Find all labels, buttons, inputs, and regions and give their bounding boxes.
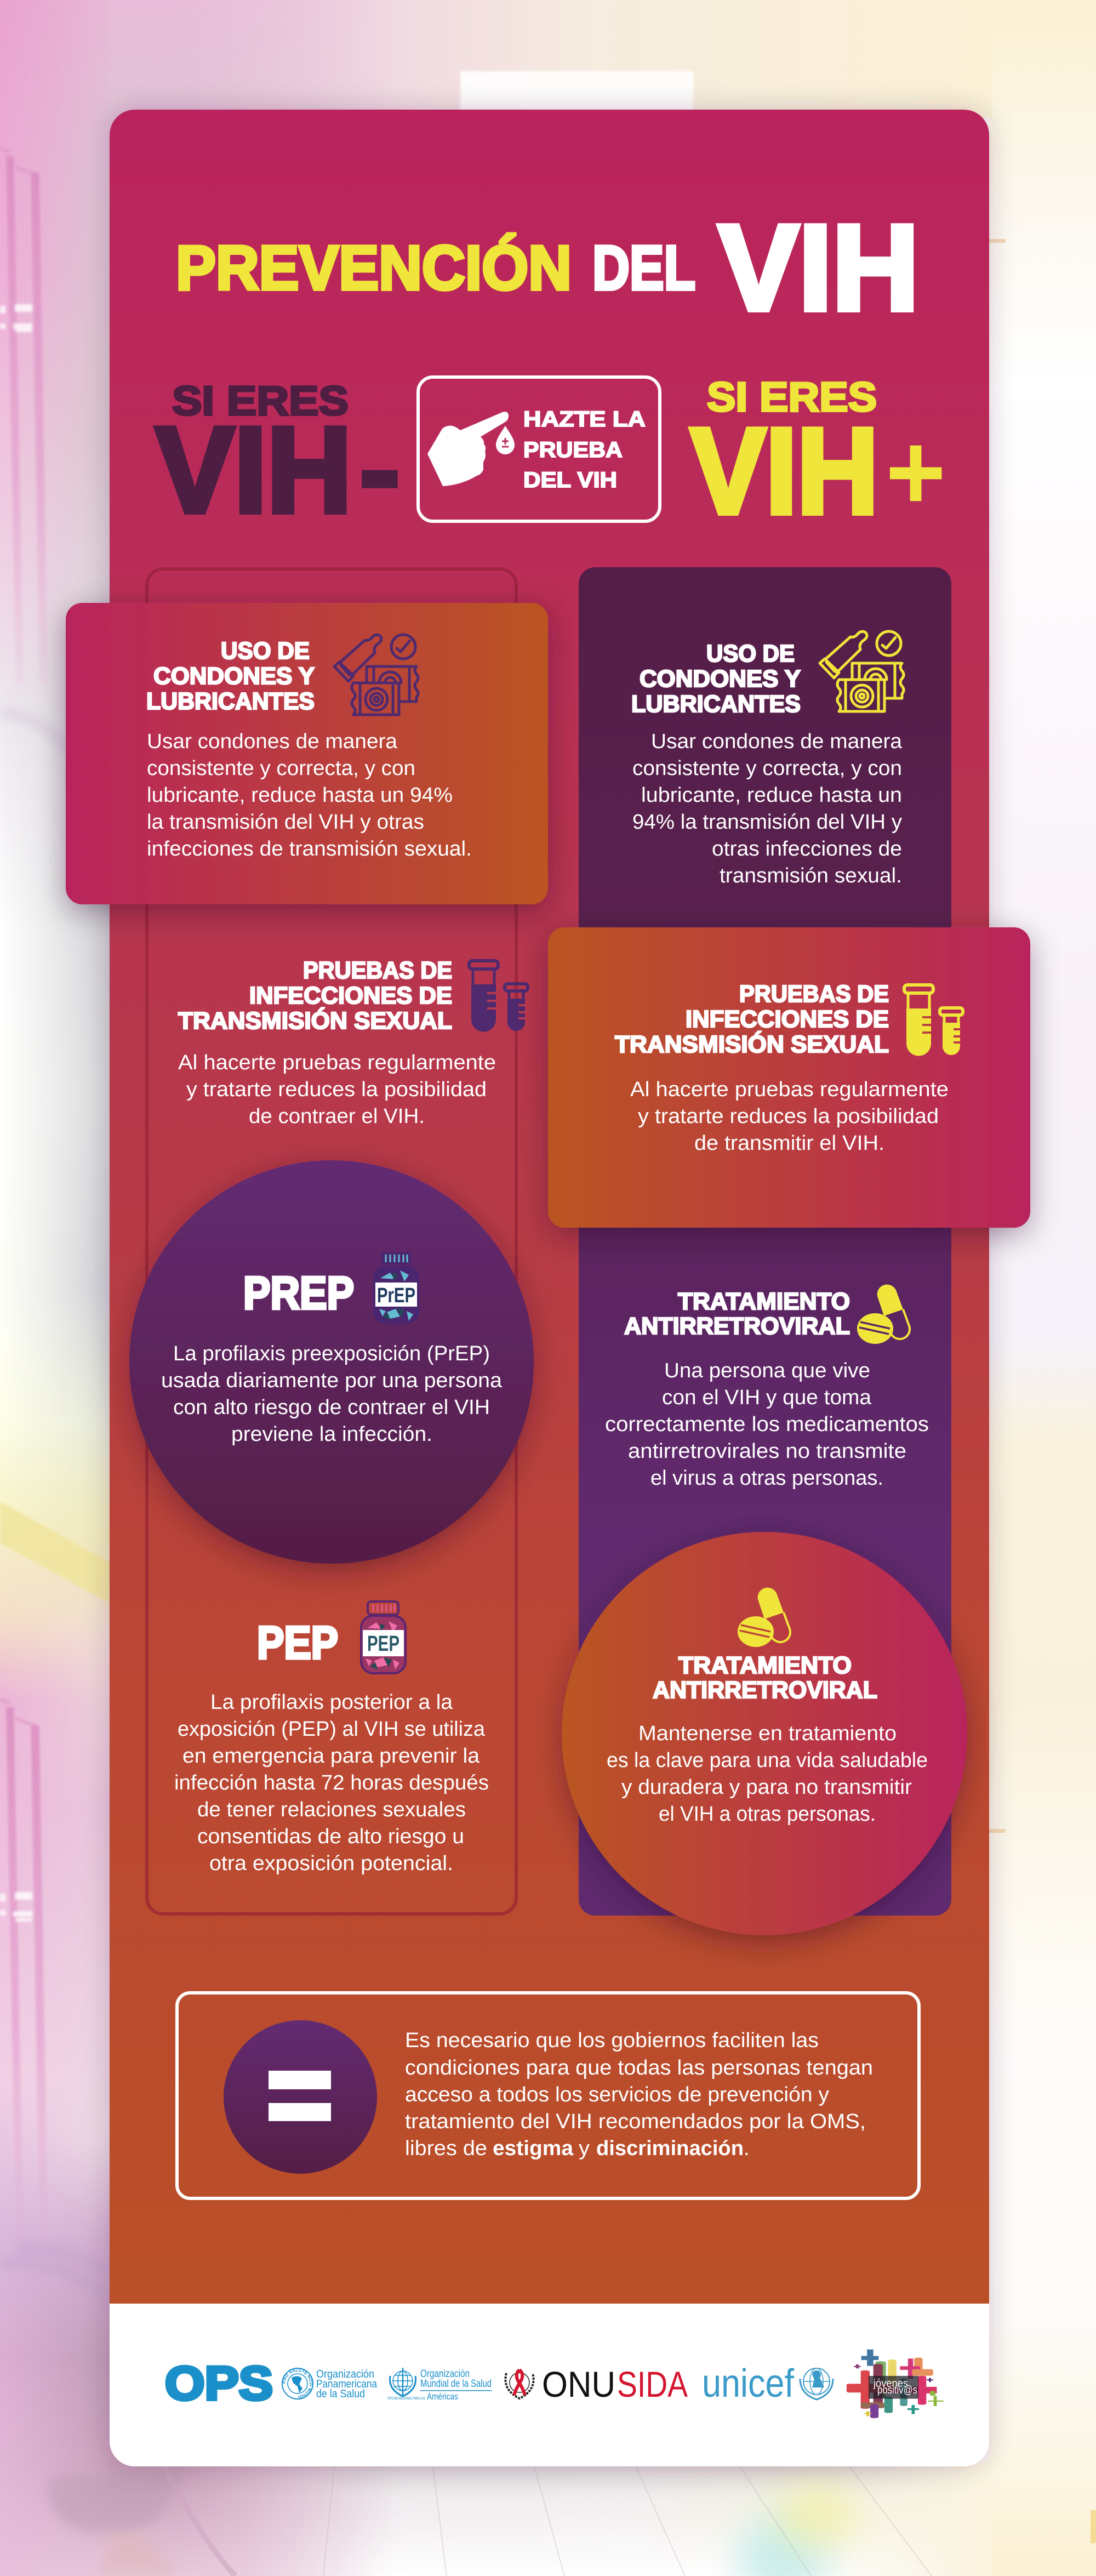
heading: si eres VIH positivo <box>690 374 946 539</box>
icon: test tubes <box>904 985 963 1056</box>
text block: usada diariamente por una persona <box>161 1369 503 1392</box>
panel: main gradient card <box>110 110 989 2466</box>
heading: pruebas: INFECCIONES DE <box>686 1006 889 1033</box>
heading: tratamiento: ANTIRRETROVIRAL <box>653 1677 877 1703</box>
text block: y duradera y para no transmitir <box>621 1776 912 1799</box>
heading: si eres VIH negativo: VIH <box>156 402 352 538</box>
text block: y tratarte reduces la posibilidad <box>638 1105 939 1128</box>
callout: hazte la prueba del VIH: DEL VIH <box>523 468 617 492</box>
logo: OMS <box>387 2368 492 2402</box>
block: pruebas left <box>178 957 528 1128</box>
heading: uso de condones: CONDONES Y <box>640 665 801 692</box>
heading: pruebas: INFECCIONES DE <box>249 982 452 1009</box>
text block: discriminación <box>596 2137 744 2160</box>
text block: consentidas de alto riesgo u <box>197 1825 464 1848</box>
logo: ONUSIDA <box>505 2364 688 2404</box>
text block: La profilaxis preexposición (PrEP) <box>173 1342 490 1365</box>
heading: si eres VIH positivo: SI ERES <box>707 374 877 420</box>
logos row <box>165 2349 944 2418</box>
title: VIH <box>718 200 919 336</box>
text block: con el VIH y que toma <box>662 1386 872 1409</box>
heading: PEP: PEP <box>257 1617 338 1668</box>
text block: otra exposición potencial. <box>209 1852 453 1875</box>
text block: Mantenerse en tratamiento <box>638 1722 897 1745</box>
heading: tratamiento: ANTIRRETROVIRAL <box>624 1313 850 1340</box>
text block <box>632 730 903 887</box>
heading: pruebas <box>178 957 452 1034</box>
icon: pills <box>857 1285 910 1344</box>
text block <box>405 2029 873 2160</box>
text block <box>607 1722 928 1826</box>
block: condones right <box>631 631 904 887</box>
heading: tratamiento: TRATAMIENTO <box>678 1288 850 1315</box>
icon: hand with blood drop <box>427 412 515 486</box>
callout: hazte la prueba del VIH: PRUEBA <box>523 438 623 462</box>
icon: PEP bottle <box>361 1602 406 1673</box>
text block: consistente y correcta, y con <box>147 757 415 780</box>
text block: acceso a todos los servicios de prevención y <box>405 2083 829 2106</box>
text block: Una persona que vive <box>664 1359 870 1382</box>
panel: right dark column <box>579 567 951 1916</box>
text block <box>147 730 472 860</box>
heading: si eres VIH positivo: + <box>886 411 946 533</box>
text block: correctamente los medicamentos <box>605 1413 929 1436</box>
logo: OPS: de la Salud <box>316 2388 365 2400</box>
callout: hazte la prueba del VIH: HAZTE LA <box>523 407 646 431</box>
panel: left outline column <box>147 569 516 1914</box>
text block: infecciones de transmisión sexual. <box>147 837 472 860</box>
text block <box>178 1051 496 1128</box>
text block <box>630 1078 949 1155</box>
text block: infección hasta 72 horas después <box>174 1771 489 1794</box>
circle: tratamiento antirretroviral <box>562 1532 967 1935</box>
text block: Usar condones de manera <box>651 730 903 753</box>
text block: la transmisión del VIH y otras <box>147 811 424 834</box>
text block: tratamiento del VIH recomendados por la OMS, <box>405 2110 866 2133</box>
callout: equality statement <box>177 1993 919 2198</box>
text block <box>174 1691 489 1875</box>
text block <box>161 1342 503 1446</box>
text block: consistente y correcta, y con <box>632 757 902 780</box>
logo: jóvenes positiv@s <box>847 2350 944 2418</box>
text block: antirretrovirales no transmite <box>628 1440 906 1463</box>
text block: Es necesario que los gobiernos faciliten las <box>405 2029 819 2052</box>
panel: white logo footer <box>110 2304 989 2466</box>
heading: uso de condones <box>146 637 315 715</box>
text block: . <box>744 2137 750 2160</box>
title: DEL <box>592 233 695 303</box>
circle: PrEP <box>129 1160 534 1564</box>
icon: condom and packets <box>334 635 418 715</box>
logo: unicef: unicef <box>702 2362 795 2406</box>
text block: transmisión sexual. <box>720 864 902 887</box>
title <box>176 200 919 336</box>
icon: equals sign <box>224 2020 377 2174</box>
card: pruebas right <box>548 927 1030 1228</box>
logo: OMS: Américas <box>427 2391 458 2402</box>
callout: hazte la prueba del VIH <box>418 377 660 521</box>
block: PEP <box>174 1602 489 1875</box>
text block: de tener relaciones sexuales <box>197 1798 466 1821</box>
text block: estigma <box>493 2137 574 2160</box>
icon: PrEP bottle <box>373 1252 419 1324</box>
logo: OPS <box>165 2357 378 2410</box>
heading: si eres VIH negativo: - <box>356 381 403 551</box>
text block: con alto riesgo de contraer el VIH <box>173 1396 490 1419</box>
text block: 94% la transmisión del VIH y <box>632 811 902 834</box>
card: condones left <box>66 603 548 904</box>
text block: en emergencia para prevenir la <box>182 1745 480 1768</box>
text block: Usar condones de manera <box>147 730 398 753</box>
heading: uso de condones: CONDONES Y <box>153 663 315 689</box>
heading: si eres VIH positivo: VIH <box>690 403 878 539</box>
logo: OPS: Panamericana <box>316 2378 378 2390</box>
text block: lubricante, reduce hasta un 94% <box>147 784 453 807</box>
heading: uso de condones: LUBRICANTES <box>146 688 315 715</box>
logo: ONUSIDA: SIDA <box>617 2364 688 2404</box>
heading: si eres VIH negativo: SI ERES <box>172 378 349 424</box>
text block: es la clave para una vida saludable <box>607 1749 928 1772</box>
logo: jóvenes positiv@s: jóvenes <box>873 2378 908 2390</box>
icon: PEP bottle: PEP <box>367 1632 399 1656</box>
heading: tratamiento: TRATAMIENTO <box>678 1652 852 1679</box>
heading: si eres VIH negativo <box>156 378 403 551</box>
icon: condom and packets <box>820 631 904 711</box>
heading: pruebas: PRUEBAS DE <box>739 981 889 1007</box>
logo: OPS: OPS <box>165 2357 273 2410</box>
logo: OMS: Mundial de la Salud <box>420 2378 492 2390</box>
logo: OPS: Organización <box>316 2368 374 2380</box>
heading: uso de condones <box>631 640 801 717</box>
text block: y <box>579 2137 590 2160</box>
text block: y tratarte reduces la posibilidad <box>186 1078 487 1101</box>
text block: libres de <box>405 2137 487 2160</box>
icon: pills <box>738 1588 790 1647</box>
text block: Al hacerte pruebas regularmente <box>630 1078 949 1101</box>
heading: PREP: PREP <box>243 1267 354 1319</box>
heading: tratamiento <box>653 1652 877 1703</box>
heading: pruebas: TRANSMISIÓN SEXUAL <box>615 1030 889 1058</box>
text block: lubricante, reduce hasta un <box>641 784 902 807</box>
logo: OMS: OFICINA REGIONAL PARA LAS <box>387 2397 425 2401</box>
text block: de contraer el VIH. <box>249 1105 425 1128</box>
text block: de transmitir el VIH. <box>694 1132 884 1155</box>
text block: condiciones para que todas las personas tengan <box>405 2056 873 2079</box>
text block: el VIH a otras personas. <box>659 1803 876 1826</box>
heading: pruebas: TRANSMISIÓN SEXUAL <box>178 1007 452 1034</box>
text block: La profilaxis posterior a la <box>210 1691 453 1714</box>
text block: Al hacerte pruebas regularmente <box>178 1051 496 1074</box>
heading: uso de condones: USO DE <box>706 640 795 667</box>
heading: pruebas: PRUEBAS DE <box>303 957 452 984</box>
text block: el virus a otras personas. <box>650 1467 883 1490</box>
logo: OMS: Organización <box>420 2368 470 2380</box>
logo: ONUSIDA: ONU <box>542 2364 615 2404</box>
text block: previene la infección. <box>231 1423 432 1446</box>
text block: otras infecciones de <box>712 837 902 860</box>
logo: OPS: PRO SALUTE NOVI MUNDI <box>283 2369 312 2398</box>
logo: jóvenes positiv@s: positiv@s <box>877 2384 917 2396</box>
heading: uso de condones: USO DE <box>221 637 310 664</box>
heading: uso de condones: LUBRICANTES <box>631 691 801 717</box>
block: tratamiento antirretroviral right <box>605 1285 929 1490</box>
title: PREVENCIÓN <box>176 233 572 303</box>
heading: pruebas <box>615 981 889 1058</box>
icon: test tubes <box>469 961 528 1031</box>
heading: tratamiento <box>624 1288 850 1340</box>
icon: PrEP bottle: PrEP <box>377 1284 415 1307</box>
text block: exposición (PEP) al VIH se utiliza <box>178 1718 486 1741</box>
text block <box>605 1359 929 1490</box>
